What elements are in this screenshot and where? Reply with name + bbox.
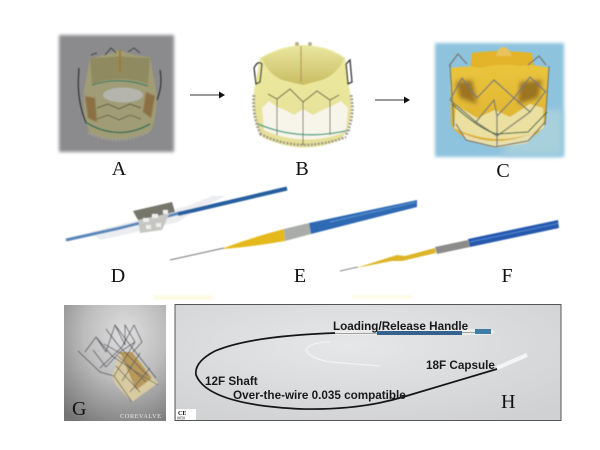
panel D: crimped valve on catheter [66, 188, 287, 240]
label A: A [112, 158, 127, 180]
label loading/release handle: Loading/Release Handle [333, 320, 469, 333]
CoreValve wordmark: COREVALVE [120, 413, 162, 420]
label 18F capsule: 18F Capsule [426, 359, 495, 372]
label H: H [501, 391, 515, 413]
panel E: yellow tip catheter [170, 200, 417, 260]
CE mark: CE [178, 411, 186, 417]
CE mark [176, 409, 196, 420]
panel B: valve with white leaflets [254, 42, 352, 148]
panel F: slim yellow tip catheter [340, 220, 559, 271]
handle [335, 329, 495, 335]
stent frame [78, 325, 158, 402]
label 12F shaft: 12F Shaft [205, 375, 258, 388]
label C: C [496, 160, 510, 182]
label E: E [294, 265, 306, 287]
label F: F [501, 265, 513, 287]
valve C body [449, 47, 549, 148]
panel H: delivery catheter [175, 304, 561, 420]
capsule [497, 355, 527, 368]
label D: D [111, 265, 125, 287]
label B: B [295, 158, 309, 180]
label over-the-wire: Over-the-wire 0.035 compatible [233, 389, 406, 402]
faint yellow smudges above panels [153, 295, 213, 300]
side port tubing [306, 342, 380, 366]
arrow B to C [375, 96, 410, 104]
CE mark: 0050 [177, 416, 185, 420]
arrow A to B [190, 92, 225, 98]
panel C: valve on blue background [435, 43, 564, 157]
panel A: valve on gray background [59, 35, 174, 152]
catheter shaft [196, 333, 497, 409]
valve A body [78, 48, 161, 140]
label G: G [72, 398, 86, 420]
panel G: CoreValve frame [64, 305, 166, 421]
